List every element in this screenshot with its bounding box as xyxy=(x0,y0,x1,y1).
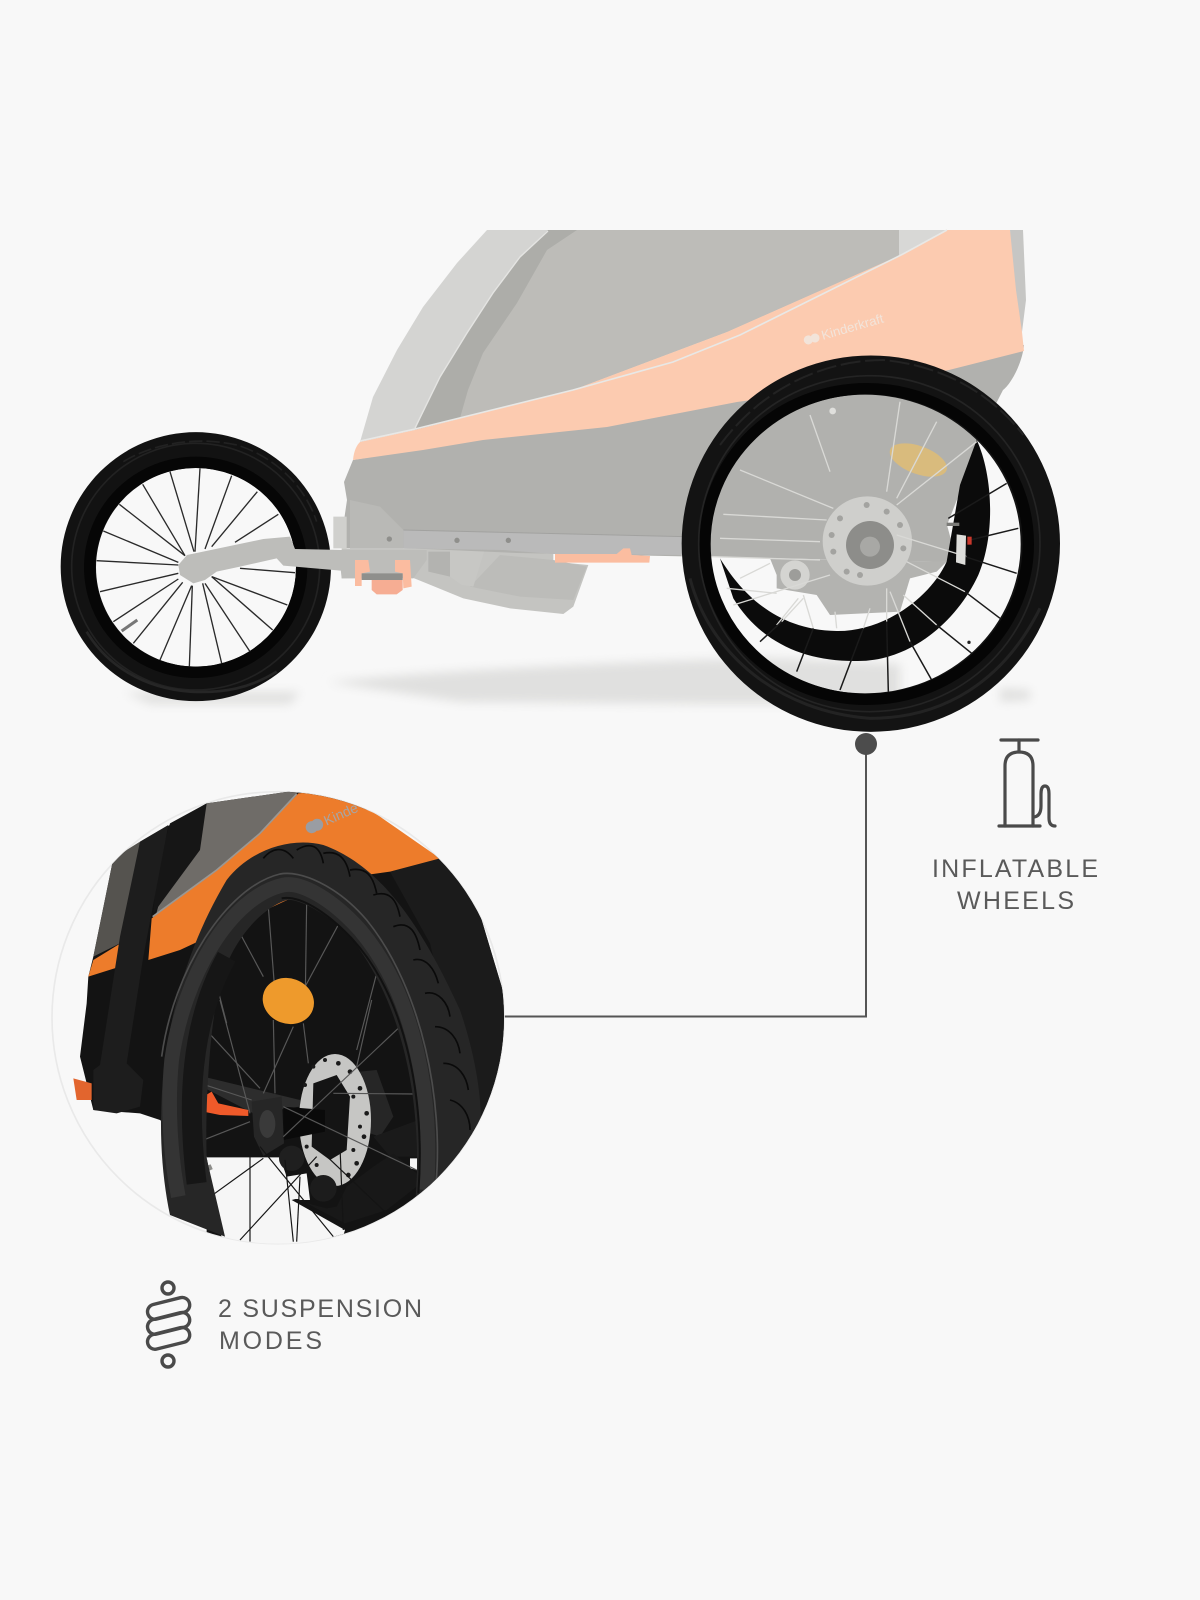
rear spokes dark xyxy=(760,483,1018,692)
reflector close-up xyxy=(262,978,314,1024)
brand logo close-up xyxy=(306,806,358,834)
front tyre xyxy=(61,432,331,701)
hub and wheel interior xyxy=(195,902,418,1247)
lower mechanism xyxy=(279,1146,304,1171)
rail bolts xyxy=(387,536,511,543)
valve close-up xyxy=(208,1164,213,1170)
inflatable wheels text: INFLATABLE xyxy=(932,855,1098,883)
front wheel xyxy=(61,432,345,701)
inflatable wheels text: WHEELS xyxy=(957,887,1074,915)
brake disc close-up xyxy=(299,1054,371,1186)
rear tyre xyxy=(682,356,1060,732)
brand logo close-up: Kinde xyxy=(321,799,360,828)
brand logo on trailer: Kinderkraft xyxy=(820,311,886,343)
front fork arm xyxy=(178,537,345,583)
spokes over body xyxy=(195,1000,417,1170)
orange hitch clip xyxy=(355,560,412,594)
brake mechanism xyxy=(770,558,947,615)
right window corner xyxy=(899,230,950,256)
front spokes xyxy=(97,468,295,667)
spokes over ground xyxy=(214,1146,352,1242)
rear spokes light xyxy=(682,402,977,642)
ground opening xyxy=(207,1157,345,1247)
valve xyxy=(122,620,137,631)
label: suspension modes xyxy=(146,1282,431,1367)
infographic canvas xyxy=(51,230,1097,1369)
under-carriage storage pocket xyxy=(342,543,588,614)
connector dot xyxy=(855,733,877,755)
caliper xyxy=(360,1070,393,1137)
axle xyxy=(283,1107,325,1140)
hitch bar xyxy=(332,550,427,578)
orange panel close-up xyxy=(148,790,440,960)
frame tube xyxy=(93,825,168,1113)
window pane close-up xyxy=(155,790,300,918)
brake disc xyxy=(823,496,912,586)
far rear tyre and rear wheel xyxy=(682,356,1060,732)
piping close-up xyxy=(153,794,297,917)
suspension modes text: MODES xyxy=(219,1327,322,1355)
window pane dark band xyxy=(415,230,903,430)
rail close-up xyxy=(203,1077,300,1113)
detail circle: rear wheel close-up xyxy=(52,790,507,1247)
hub flange xyxy=(252,1110,284,1156)
black trailer body xyxy=(80,790,507,1237)
connector line xyxy=(504,744,866,1016)
brand logo on trailer xyxy=(802,311,886,348)
far tyre crescent xyxy=(720,440,990,661)
lower body xyxy=(340,345,1024,562)
label: inflatable wheels xyxy=(932,740,1107,915)
window frame xyxy=(360,230,950,442)
orange band xyxy=(353,230,1024,460)
right side panel xyxy=(1010,230,1026,332)
orange clip close-up left xyxy=(73,1078,92,1100)
trailer body faded xyxy=(332,230,1026,614)
icon: air pump xyxy=(999,740,1055,826)
frame rail and hitch xyxy=(332,500,683,594)
upper spokes xyxy=(215,902,377,1050)
orange footrest xyxy=(555,548,650,563)
close-up tyre xyxy=(161,843,481,1237)
icon: suspension spring xyxy=(146,1282,191,1367)
reflector xyxy=(885,437,951,483)
frame rail xyxy=(403,530,683,555)
close-up rim xyxy=(170,885,428,1197)
hitch connector xyxy=(350,500,403,548)
orange clip close-up xyxy=(203,1092,248,1116)
seat post bracket xyxy=(956,534,966,565)
tread pattern xyxy=(263,846,470,1130)
suspension modes text: 2 SUSPENSION xyxy=(218,1295,422,1323)
window pane xyxy=(460,230,899,418)
white piping xyxy=(360,230,947,441)
ground shadow xyxy=(125,658,1030,704)
